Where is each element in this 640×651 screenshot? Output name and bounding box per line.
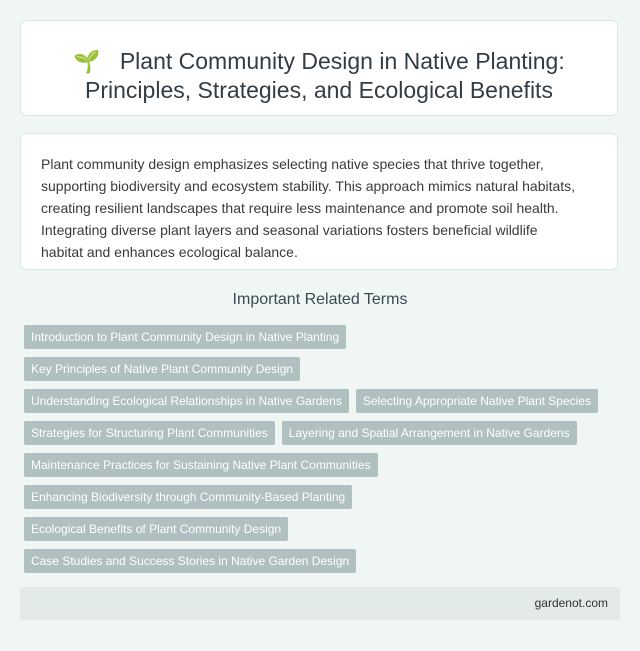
description text: supporting biodiversity and ecosystem stability. This approach mimics natural habitats, [41, 178, 575, 194]
tag list [24, 325, 598, 573]
tag list: Case Studies and Success Stories in Native Garden Design [31, 554, 349, 568]
description text: Plant community design emphasizes selecting native species that thrive together, [41, 156, 544, 172]
tag list: Selecting Appropriate Native Plant Species [363, 394, 591, 408]
tag list: Introduction to Plant Community Design in Native Planting [31, 330, 339, 344]
tag list: Understanding Ecological Relationships in Native Gardens [31, 394, 342, 408]
tag list: Layering and Spatial Arrangement in Native Gardens [289, 426, 570, 440]
description text: creating resilient landscapes that require less maintenance and promote soil health. [41, 200, 559, 216]
footer: gardenot.com [535, 596, 608, 610]
footer [20, 587, 620, 620]
description text: habitat and enhances ecological balance. [41, 244, 298, 260]
tag list: Ecological Benefits of Plant Community Design [31, 522, 281, 536]
tag list: Maintenance Practices for Sustaining Native Plant Communities [31, 458, 370, 472]
description text: Integrating diverse plant layers and seasonal variations fosters beneficial wildlife [41, 222, 538, 238]
title: 🌱 Plant Community Design in Native Planting: [73, 48, 565, 74]
tag list: Key Principles of Native Plant Community Design [31, 362, 293, 376]
description text [20, 133, 618, 270]
tag list: Enhancing Biodiversity through Community-Based Planting [31, 490, 345, 504]
tag list: Strategies for Structuring Plant Communities [31, 426, 268, 440]
heading: related terms: Important Related Terms [233, 291, 407, 308]
title [20, 20, 618, 116]
title: Principles, Strategies, and Ecological Benefits [85, 77, 553, 103]
